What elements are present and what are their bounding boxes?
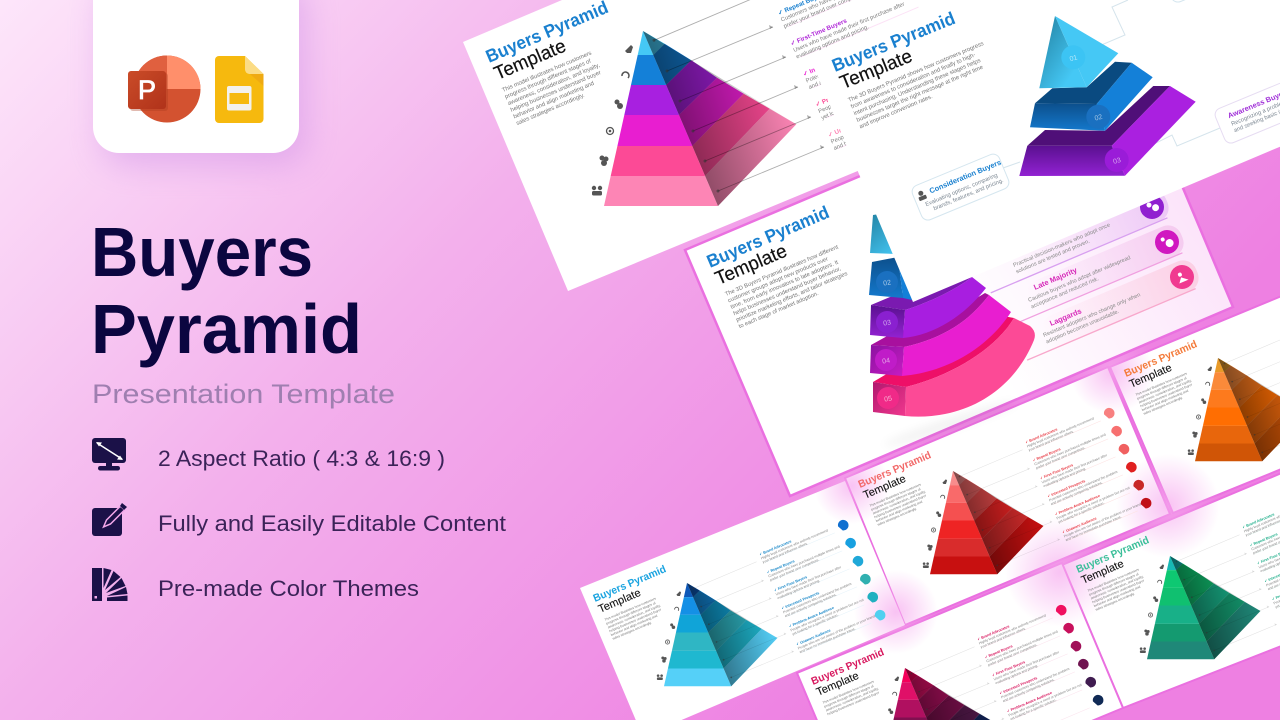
- description: orange: sales strategies accordingly.: [1143, 396, 1183, 416]
- icon: PowerPoint: [128, 56, 200, 122]
- pyramid: blue: and have no immediate purchase intent.: [799, 627, 856, 654]
- description: blue: helping businesses understand buyer: [609, 607, 663, 633]
- description: red: [869, 482, 931, 527]
- pyramid: red: yet looking for a specific solution.: [1057, 501, 1105, 524]
- panel: slide 3, curved pyramid: [685, 62, 1233, 496]
- description: slide 1: helping businesses understand buyer: [510, 70, 602, 114]
- layer 03: [1019, 86, 1196, 176]
- pyramid: magenta: ✓ Repeat Buyers: [984, 644, 1013, 660]
- pyramid: blue: People who are not aware of the problem or your brand: [797, 614, 876, 650]
- adoption rows: Laggards: [1048, 306, 1083, 328]
- pyramid: red: ✓ Interested Prospects: [1047, 479, 1086, 499]
- description: red: sales strategies accordingly.: [877, 507, 917, 527]
- title: magenta: Template: [815, 670, 861, 699]
- card: awareness buyers: [1213, 75, 1280, 145]
- layer 02: [1030, 62, 1153, 131]
- adoption rows: [978, 186, 1203, 360]
- description: red: behavior and align marketing and: [875, 500, 923, 523]
- adoption rows: solutions are tested and proven.: [1015, 238, 1091, 275]
- pyramid: blue: ✓ Unaware Audience: [796, 628, 831, 647]
- description: green: behavior and align marketing and: [1093, 585, 1141, 608]
- panel: slide 2, stacked 3D pyramid: [810, 0, 1280, 302]
- pyramid: red: your brand and influence others.: [1028, 429, 1075, 452]
- feature: color themes: Pre-made Color Themes: [158, 576, 419, 601]
- description: slide 1: behavior and align marketing and: [513, 81, 595, 120]
- pyramid: magenta: Highly loyal customers who actively recommend: [978, 613, 1047, 645]
- adoption rows: Practical decision-makers who adopt once: [1012, 222, 1111, 269]
- description: slide 3: to each stage of market adoption.: [738, 291, 820, 330]
- pyramid: blue: evaluating options and pricing.: [777, 579, 821, 600]
- pyramid: slide 1: [592, 0, 979, 206]
- title: green: Buyers Pyramid: [1074, 534, 1151, 576]
- pyramid: magenta: People who recognize a need or problem but are not: [1008, 683, 1082, 717]
- pyramid: magenta: ✓ First-Time Buyers: [991, 660, 1026, 678]
- pyramid: magenta: ✓ Brand Advocates: [977, 624, 1010, 642]
- pyramid: blue: ✓ Problem-Aware Audience: [788, 606, 835, 629]
- layer 03: 03: [883, 319, 892, 328]
- pyramid: green: [1140, 493, 1280, 659]
- icon: edit: [92, 503, 127, 536]
- pyramid: blue: prefer your brand over competitors.: [769, 558, 820, 582]
- layer 02: 02: [1094, 114, 1103, 123]
- panel: slide 1, flat pyramid: [463, 0, 1000, 291]
- pyramid: slide 1: People who recognize a need or problem but are not: [818, 57, 945, 115]
- icon: monitor: [92, 438, 126, 470]
- heading: Buyers Pyramid: Buyers: [91, 213, 313, 291]
- red slide content: [856, 408, 1151, 574]
- adoption rows: Late Majority: [1032, 265, 1079, 292]
- magenta slide content: [809, 605, 1103, 720]
- green slide content: [1074, 493, 1280, 659]
- pyramid: magenta: prefer your brand over competitors.: [987, 643, 1038, 667]
- pyramid: magenta: ✓ Interested Prospects: [999, 676, 1038, 696]
- pyramid: magenta: [875, 605, 1103, 720]
- description: slide 3: customer groups adopt new products over: [727, 256, 829, 304]
- pyramid: green: ✓ Repeat Buyers: [1249, 532, 1278, 548]
- pyramid: slide 1: ✓ Unaware Audience: [827, 108, 888, 139]
- 3D pyramid: [1019, 16, 1196, 176]
- description: slide 3: helps businesses understand buyer behavior,: [733, 266, 842, 317]
- description: green: sales strategies accordingly.: [1095, 592, 1135, 612]
- description: blue: This model illustrates how customers: [604, 596, 657, 622]
- card: consideration buyers: [910, 152, 1011, 222]
- description: slide 2: and improve conversion rates.: [859, 94, 934, 130]
- pyramid: slide 1: and are actively comparing solutions.: [808, 48, 898, 91]
- pyramid: red: ✓ First-Time Buyers: [1039, 463, 1074, 481]
- description: red: helping businesses understand buyer: [874, 493, 928, 519]
- pyramid: slide 1: Potential customers who understand the problem: [805, 30, 924, 85]
- pyramid: blue: Customers who have purchased multiple times and: [768, 545, 840, 578]
- connectors: [1003, 0, 1220, 168]
- adoption rows: acceptance and reduced risk.: [1030, 276, 1100, 310]
- feature: editable content: [92, 503, 506, 536]
- pyramid: blue: and are actively comparing solutions.: [784, 593, 837, 618]
- title: slide 1: Template: [491, 36, 569, 85]
- adoption rows: Cautious buyers who adopt after widespread: [1027, 255, 1132, 304]
- layer 05: 05: [884, 395, 893, 404]
- pyramid: magenta: your brand and influence others.: [980, 626, 1027, 649]
- logo card: [93, 0, 307, 165]
- layer 01: [870, 210, 925, 255]
- panel: green slide: [1062, 472, 1280, 708]
- description: slide 3: time, from early innovators to late adopters. It: [730, 260, 840, 311]
- adoption rows: adoption becomes unavoidable.: [1045, 309, 1121, 345]
- panel: magenta slide: [797, 563, 1123, 720]
- pyramid: slide 1: evaluating options and pricing.: [795, 24, 870, 60]
- description: orange: This model illustrates how customers: [1135, 371, 1188, 397]
- pyramid: red: Potential customers who understand the problem: [1048, 470, 1118, 502]
- card: consideration buyers: Evaluating options, comparing: [925, 173, 999, 208]
- pyramid: slide 1: People who are not aware of the problem or your brand: [830, 84, 963, 146]
- pyramid: magenta: evaluating options and pricing.: [995, 664, 1039, 685]
- heading: Buyers Pyramid: Pyramid: [91, 290, 362, 368]
- title: slide 2: Buyers Pyramid: [829, 8, 958, 76]
- description: green: helping businesses understand buyer: [1092, 578, 1146, 604]
- description: slide 2: from awareness to consideration and finally to high-: [850, 52, 977, 110]
- pyramid: slide 1: Users who have made their first purchase after: [793, 2, 906, 54]
- title: magenta: Buyers Pyramid: [809, 646, 886, 688]
- pyramid: red: ✓ Brand Advocates: [1025, 427, 1058, 445]
- adoption rows: Resistant adopters who change only when: [1042, 292, 1142, 339]
- title: green: Template: [1080, 558, 1126, 587]
- layer 02: 02: [883, 279, 892, 288]
- layer 01: 01: [1069, 54, 1078, 63]
- layer 04: [870, 293, 1011, 376]
- feature: aspect ratio: 2 Aspect Ratio ( 4:3 & 16:9 ): [158, 446, 445, 471]
- title: red: Buyers Pyramid: [856, 449, 933, 491]
- curved pyramid: [869, 210, 1035, 450]
- description: slide 1: sales strategies accordingly.: [516, 93, 586, 127]
- pyramid: red: prefer your brand over competitors.: [1035, 446, 1086, 470]
- description: magenta: progress through different stages of: [823, 684, 874, 709]
- title: slide 3: Buyers Pyramid: [704, 202, 832, 272]
- layer 03: [870, 270, 986, 338]
- layer 02: [869, 257, 930, 300]
- pyramid: blue: People who recognize a need or problem but are not: [790, 598, 864, 632]
- description: red: This model illustrates how customers: [869, 482, 922, 508]
- description: blue: awareness, consideration, and loyalty,: [607, 603, 661, 629]
- pyramid: slide 1: yet looking for a specific solution.: [820, 83, 901, 121]
- pyramid: blue: Potential customers who understand the problem: [782, 582, 852, 614]
- soft glows around slide corners: [814, 330, 1220, 654]
- description: green: This model illustrates how customers: [1087, 567, 1140, 593]
- blue slide content: [591, 520, 885, 686]
- pyramid: red: and are actively comparing solutions.: [1050, 481, 1103, 506]
- description: green: awareness, consideration, and loyalty,: [1090, 574, 1144, 600]
- pyramid: blue: ✓ Brand Advocates: [759, 539, 792, 557]
- pyramid: red: Users who have made their first purchase after: [1041, 453, 1108, 484]
- description: orange: progress through different stages of: [1136, 376, 1187, 401]
- title: orange: Buyers Pyramid: [1122, 338, 1199, 380]
- pyramid: slide 1: ✓ Interested Prospects: [802, 44, 869, 78]
- feature: color themes: [92, 568, 419, 601]
- description: blue: [604, 596, 666, 641]
- description: slide 2: intent purchasing. Understanding these stages helps: [853, 58, 982, 117]
- description: magenta: [822, 679, 881, 716]
- pyramid: magenta: and are actively comparing solutions.: [1002, 678, 1055, 703]
- title: orange: Template: [1128, 362, 1174, 391]
- description: slide 1: [501, 49, 610, 127]
- description: orange: helping businesses understand buyer: [1140, 382, 1194, 408]
- pyramid: slide 1: ✓ Problem-Aware Audience: [815, 70, 894, 109]
- layer 03: 03: [1112, 157, 1122, 166]
- description: slide 3: The 3D Buyers Pyramid illustrates how different: [724, 244, 840, 298]
- pyramid: blue: [657, 520, 885, 686]
- description: blue: sales strategies accordingly.: [612, 621, 652, 641]
- description: red: progress through different stages of: [870, 487, 921, 512]
- subtitle: Presentation Template: [92, 379, 395, 409]
- orange slide content: [1122, 295, 1280, 461]
- icon: Google Slides: [215, 56, 264, 123]
- card: consideration buyers: Consideration Buyers: [928, 158, 1002, 195]
- heading: Buyers Pyramid: [91, 213, 362, 368]
- pyramid: magenta: Customers who have purchased multiple times and: [986, 630, 1058, 663]
- description: slide 1: This model illustrates how customers: [501, 51, 593, 94]
- pyramid: blue: your brand and influence others.: [762, 541, 809, 564]
- description: slide 1: progress through different stages of: [504, 59, 592, 100]
- description: magenta: This model illustrates how customers: [822, 679, 875, 705]
- pyramid: red: evaluating options and pricing.: [1043, 467, 1087, 488]
- pyramid: green: ✓ Brand Advocates: [1242, 512, 1275, 530]
- layer 05: [873, 316, 1035, 417]
- description: slide 3: prioritize marketing efforts, and tailor strategies: [735, 271, 849, 324]
- title: slide 3: Template: [712, 241, 790, 290]
- pyramid: red: Highly loyal customers who actively recommend: [1026, 416, 1095, 448]
- title: slide 2: Template: [837, 46, 915, 94]
- pyramid: magenta: Potential customers who understand the problem: [1000, 667, 1070, 699]
- pyramid: red: ✓ Problem-Aware Audience: [1054, 494, 1101, 517]
- pyramid: magenta: ✓ Problem-Aware Audience: [1006, 691, 1053, 714]
- description: green: [1087, 567, 1149, 612]
- pyramid: blue: Users who have made their first purchase after: [775, 565, 842, 596]
- card: consideration buyers: brands, features, and pricing.: [933, 178, 1005, 212]
- pyramid: blue: yet looking for a specific solution.: [791, 613, 839, 636]
- feature: editable content: Fully and Easily Editable Content: [158, 511, 506, 536]
- pyramid: orange: [1188, 295, 1280, 461]
- pyramid: red: ✓ Unaware Audience: [1062, 516, 1097, 535]
- layer 01: [1039, 16, 1118, 88]
- panel: orange slide: [1110, 295, 1280, 513]
- pyramid: blue: ✓ Repeat Buyers: [766, 559, 795, 575]
- pyramid: red: [923, 408, 1151, 574]
- pyramid: red: Customers who have purchased multiple times and: [1034, 433, 1106, 466]
- panel: blue slide: [580, 481, 905, 720]
- feature: aspect ratio: [92, 438, 445, 471]
- title: blue: Buyers Pyramid: [591, 563, 668, 605]
- description: slide 2: businesses target the right message at the right time: [856, 64, 985, 124]
- pyramid: blue: Highly loyal customers who actively recommend: [760, 528, 829, 560]
- title: blue: Template: [597, 587, 643, 616]
- icon: PowerPoint: P: [138, 75, 156, 105]
- description: slide 2: [847, 41, 996, 130]
- panel: red slide: [845, 367, 1170, 625]
- description: orange: behavior and align marketing and: [1141, 389, 1189, 412]
- description: orange: [1135, 371, 1197, 416]
- pyramid: red: People who are not aware of the problem or your brand: [1063, 502, 1142, 538]
- pyramid: red: People who recognize a need or problem but are not: [1056, 486, 1130, 520]
- description: magenta: awareness, consideration, and loyalty,: [825, 686, 879, 712]
- title: red: Template: [862, 473, 908, 502]
- card: top right fragment: [1160, 0, 1261, 4]
- description: slide 2: The 3D Buyers Pyramid shows how customers progress: [847, 41, 985, 104]
- description: red: awareness, consideration, and loyalty,: [872, 489, 926, 515]
- description: orange: awareness, consideration, and loyalty,: [1138, 378, 1192, 404]
- icon: swatch fan: [92, 568, 128, 601]
- pyramid: slide 1: ✓ First-Time Buyers: [790, 17, 848, 48]
- description: blue: progress through different stages of: [605, 601, 656, 626]
- description: slide 3: [724, 244, 853, 330]
- description: green: progress through different stages of: [1088, 572, 1139, 597]
- layer 04: 04: [882, 357, 891, 366]
- pyramid: red: ✓ Repeat Buyers: [1032, 447, 1061, 463]
- pyramid: blue: ✓ Interested Prospects: [781, 591, 820, 611]
- pyramid: magenta: Users who have made their first purchase after: [993, 650, 1060, 681]
- pyramid: slide 1: and have no immediate purchase intent.: [833, 106, 931, 152]
- pyramid: red: and have no immediate purchase intent.: [1065, 515, 1122, 542]
- description: magenta: helping businesses understand buyer: [827, 690, 881, 716]
- pyramid: blue: ✓ First-Time Buyers: [773, 575, 808, 593]
- description: blue: behavior and align marketing and: [610, 614, 658, 637]
- description: slide 1: awareness, consideration, and loyalty,: [507, 63, 601, 107]
